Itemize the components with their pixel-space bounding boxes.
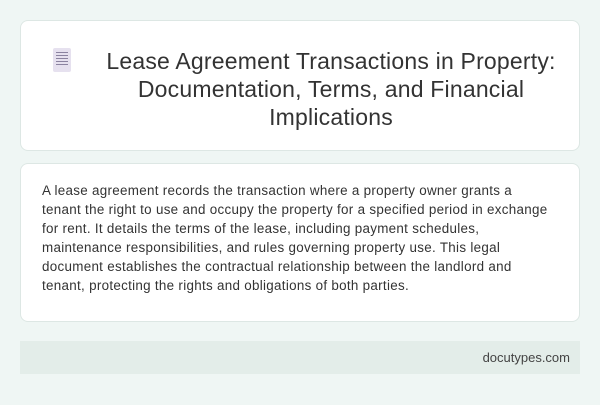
panel: header xyxy=(20,20,580,151)
panel: description xyxy=(20,163,580,322)
text block: description: tenant the right to use and occupy the property for a specified period in exchange xyxy=(42,202,548,217)
text block: description: maintenance responsibilities, and rules governing property use. This legal xyxy=(42,240,500,255)
text block: description: A lease agreement records the transaction where a property owner grants a xyxy=(42,183,512,198)
text block: description: for rent. It details the terms of the lease, including payment schedules, xyxy=(42,221,479,236)
icon: document scroll xyxy=(53,48,71,72)
footer bar xyxy=(20,341,580,374)
footer text: docutypes.com xyxy=(483,350,570,365)
title: Lease Agreement Transactions in Property: Documentation, Terms, and Financial Implications xyxy=(106,48,556,130)
text block: description xyxy=(42,183,548,293)
text block: description: tenant, protecting the rights and obligations of both parties. xyxy=(42,278,409,293)
text block: description: document establishes the contractual relationship between the landlord and xyxy=(42,259,512,274)
